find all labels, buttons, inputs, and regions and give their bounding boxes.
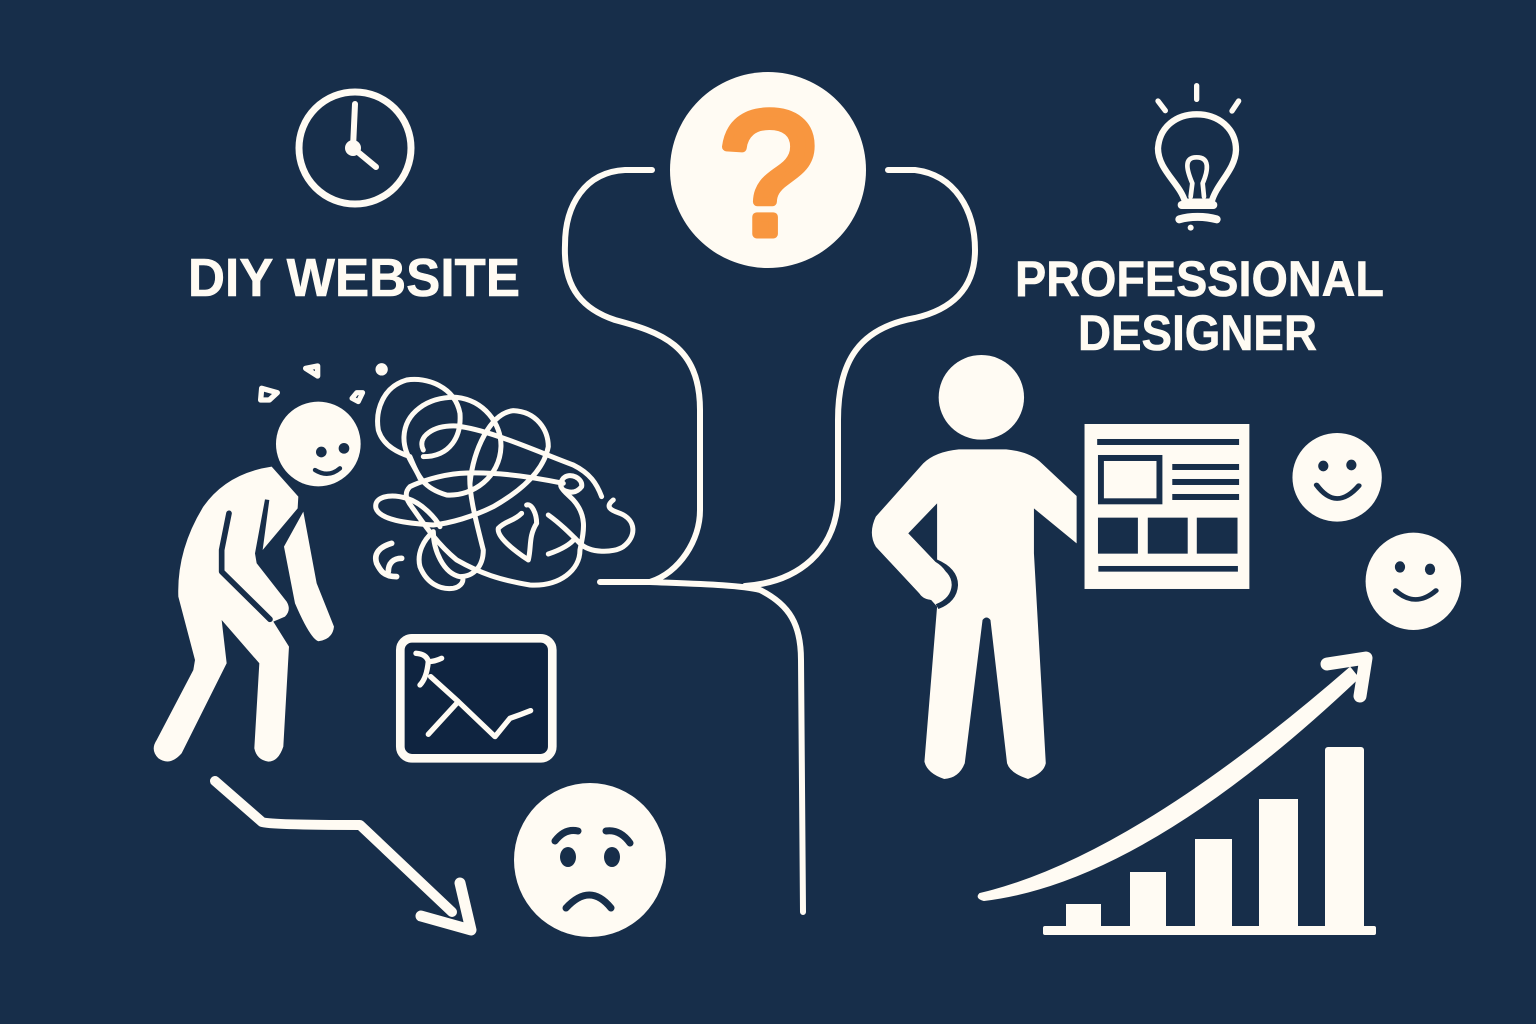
heading: Professional Designer (1015, 251, 1384, 361)
arrow: downward trend (215, 781, 471, 930)
icon: clock (299, 92, 411, 204)
icon: question mark circle: ? (719, 77, 817, 272)
heading: DIY Website: DIY WEBSITE (188, 248, 520, 308)
icon: happy face two (1366, 533, 1461, 630)
icon: question mark circle (670, 72, 866, 272)
heading: Professional Designer: DESIGNER (1078, 305, 1317, 361)
icon: light bulb (1158, 86, 1239, 231)
figure: confident designer (872, 355, 1077, 779)
bar chart: growth (1043, 747, 1376, 935)
figure: stressed person (154, 402, 361, 762)
icon: happy face one (1292, 433, 1382, 522)
heading: Professional Designer: PROFESSIONAL (1015, 251, 1384, 307)
icon: website layout (1085, 424, 1249, 589)
tangle: confused scribble (261, 364, 633, 589)
icon: sad face (514, 783, 666, 937)
chart: declining line on screen (400, 638, 552, 758)
arrow: upward growth (979, 658, 1366, 900)
connector: decision paths (565, 170, 975, 912)
